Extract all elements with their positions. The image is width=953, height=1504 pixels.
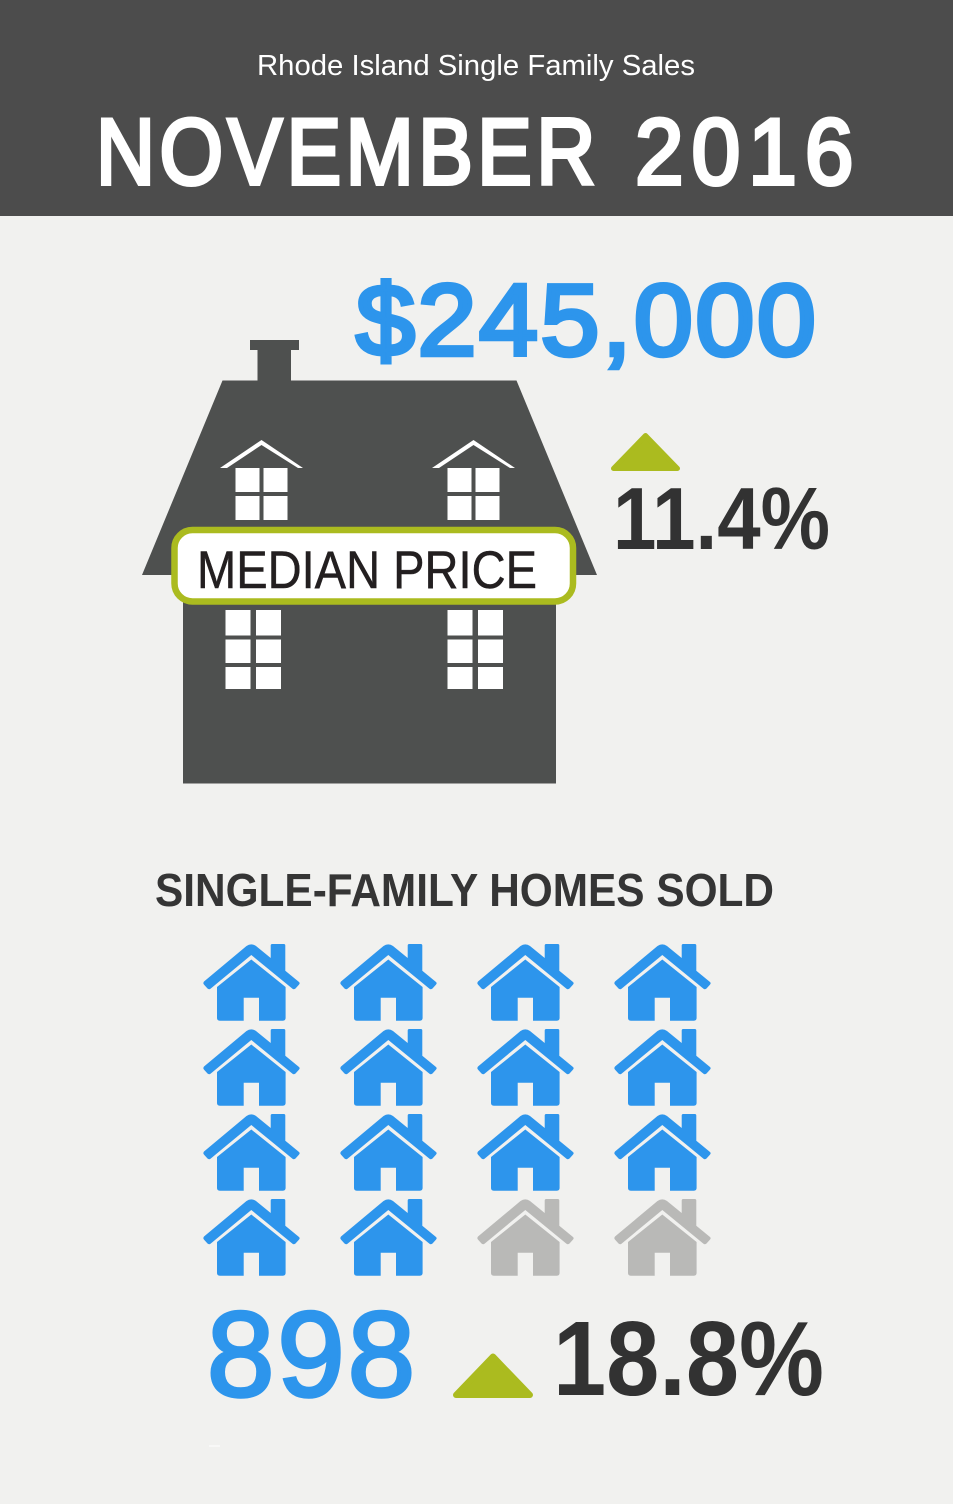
- upper right window with dormer: [432, 440, 515, 520]
- pictogram: homes sold: [203, 944, 711, 1276]
- lower right window: [448, 610, 503, 689]
- upper left window with dormer: [220, 440, 303, 520]
- panel: header band: [0, 0, 953, 216]
- icon: median price house: [142, 340, 597, 784]
- house silhouette: [142, 340, 597, 784]
- header subtitle: Rhode Island Single Family Sales: [257, 50, 695, 82]
- sales change percentage: 18.8%: [553, 1300, 824, 1418]
- homes sold value: 898: [207, 1286, 415, 1422]
- icon: sales up arrow: [456, 1356, 530, 1395]
- title: [96, 99, 854, 205]
- price change percentage: 11.4%: [613, 469, 830, 568]
- median price label: MEDIAN PRICE: [197, 541, 537, 600]
- icon: price up arrow: [614, 436, 678, 468]
- title: NOVEMBER: [96, 99, 595, 204]
- title: 2016: [635, 100, 854, 205]
- homes sold heading: SINGLE-FAMILY HOMES SOLD: [155, 864, 774, 916]
- lower left window: [226, 610, 281, 689]
- median price value: $245,000: [356, 263, 816, 376]
